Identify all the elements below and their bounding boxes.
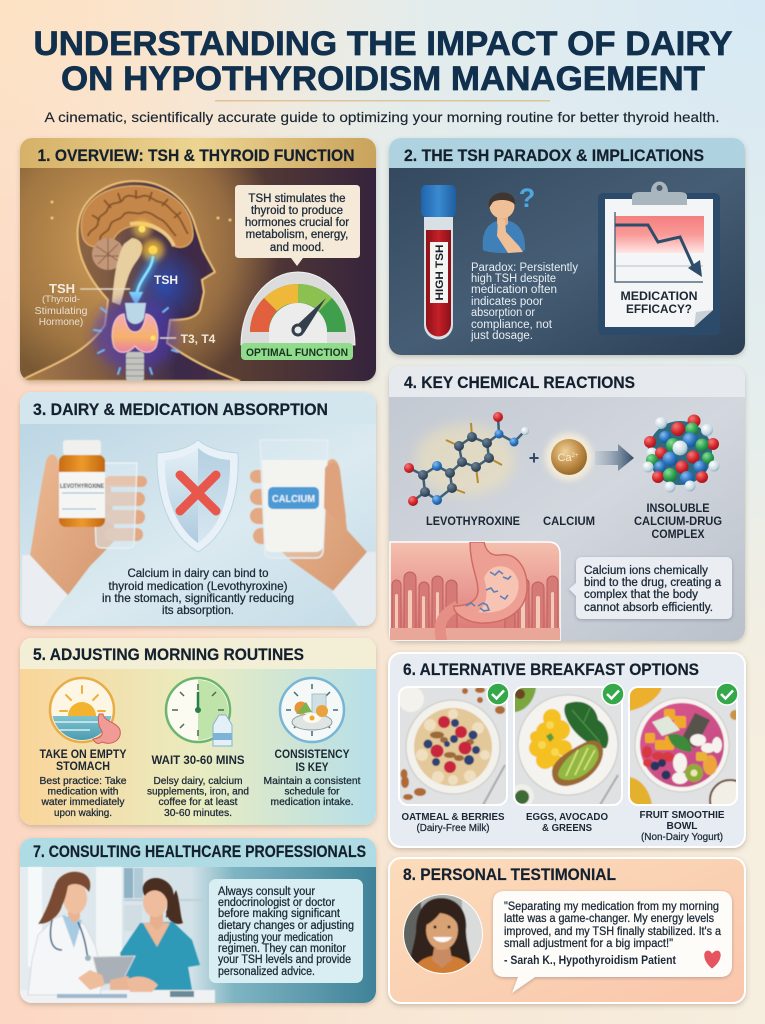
- food card: eggs avocado and greens: & GREENS: [542, 822, 592, 834]
- food card: eggs avocado and greens: EGGS, AVOCADO: [526, 811, 608, 823]
- callout: consult your doctor: your TSH levels and provide: [218, 954, 351, 966]
- heading: 2. THE TSH PARADOX & IMPLICATIONS: [404, 146, 704, 165]
- illustration: head, brain and thyroid: [20, 181, 240, 381]
- gauge: optimal function: [241, 272, 355, 360]
- text: calcium binding explanation: in the stomach, significantly reducing: [102, 591, 294, 605]
- callout: consult your doctor: regimen. They can monitor: [218, 943, 346, 955]
- icon: clock with breakfast: [280, 678, 344, 742]
- icon: blood test tube: HIGH TSH: [434, 244, 446, 300]
- callout: calcium binding: cannot absorb efficiently.: [584, 602, 713, 614]
- icon: shield with cross: [157, 440, 238, 552]
- illustration: right hand with milk glass: [250, 440, 376, 626]
- diagram: insoluble complex: COMPLEX: [652, 529, 705, 541]
- step: wait 30-60 minutes: Delsy dairy, calcium: [154, 775, 243, 787]
- diagram: insoluble complex: [634, 414, 722, 541]
- diagram: calcium ion: [543, 433, 595, 528]
- icon: green check: [716, 683, 738, 705]
- heading: 3. DAIRY & MEDICATION ABSORPTION: [33, 400, 328, 419]
- panel 4: key chemical reactions: [389, 366, 745, 642]
- label: TSH arrow: TSH: [154, 273, 178, 287]
- speech bubble: testimonial: [493, 891, 732, 993]
- food card: fruit smoothie bowl: FRUIT SMOOTHIE: [640, 809, 724, 821]
- step: take on empty stomach: upon waking.: [54, 807, 112, 819]
- text: paradox explanation: [470, 262, 578, 342]
- callout: TSH role: thyroid to produce: [251, 205, 343, 217]
- step: wait 30-60 minutes: coffee for at least: [158, 796, 238, 808]
- text: paradox explanation: absorption or: [471, 307, 535, 319]
- icon: green check: [487, 683, 509, 705]
- title: ON HYPOTHYROIDISM MANAGEMENT: [61, 60, 705, 98]
- food card: oatmeal and berries: [398, 683, 509, 834]
- text: paradox explanation: high TSH despite: [471, 273, 556, 285]
- illustration: left hand with medication and water: LEVOTHYROXINE: [60, 483, 105, 490]
- diagram: calcium ion: 2+: [572, 453, 579, 459]
- step: take on empty stomach: STOMACH: [56, 761, 110, 773]
- step: take on empty stomach: Best practice: Take: [40, 775, 127, 787]
- step: consistency is key: IS KEY: [296, 762, 329, 774]
- callout: consult your doctor: adjusting your medication: [218, 932, 333, 944]
- label: TSH definition: Hormone): [39, 317, 83, 328]
- food card: fruit smoothie bowl: (Non-Dairy Yogurt): [641, 831, 723, 843]
- callout: consult your doctor: dietary changes or adjusting: [218, 920, 354, 932]
- text: paradox explanation: medication often: [471, 284, 557, 296]
- icon: clipboard with falling chart: EFFICACY?: [626, 302, 692, 316]
- panel 1: overview: [18, 138, 378, 386]
- illustration: right hand with milk glass: CALCIUM: [272, 493, 315, 505]
- icon: sunrise and stomach: [50, 678, 120, 746]
- callout: TSH role: hormones crucial for: [245, 217, 349, 229]
- food card: oatmeal and berries: OATMEAL & BERRIES: [402, 811, 504, 823]
- diagram: calcium ion: Ca: [558, 452, 572, 464]
- step: take on empty stomach: water immediately: [41, 796, 125, 808]
- callout: consult your doctor: personalized advice.: [218, 966, 315, 978]
- photo: oatmeal bowl: [398, 686, 507, 805]
- photo: eggs plate: [510, 687, 622, 808]
- text: calcium binding explanation: Calcium in dairy can bind to: [128, 566, 269, 580]
- illustration: stomach and intestine: [390, 542, 560, 642]
- heading: 4. KEY CHEMICAL REACTIONS: [404, 373, 635, 392]
- step: wait 30-60 minutes: [147, 678, 249, 819]
- diagram: levothyroxine molecule: LEVOTHYROXINE: [426, 516, 520, 528]
- label: TSH definition: (Thyroid-: [42, 294, 80, 305]
- label: TSH definition: TSH: [49, 281, 75, 296]
- food card: eggs avocado and greens: [510, 683, 624, 834]
- heading: 5. ADJUSTING MORNING ROUTINES: [33, 645, 304, 664]
- step: take on empty stomach: medication with: [48, 786, 119, 798]
- speech bubble: testimonial: latte was a game-changer. My energy levels: [504, 911, 714, 925]
- icon: blood test tube: [421, 185, 456, 340]
- title: [34, 25, 733, 98]
- icon: clipboard with falling chart: [598, 182, 720, 335]
- step: take on empty stomach: TAKE ON EMPTY: [40, 749, 127, 761]
- icon: heart: [704, 951, 721, 968]
- speech bubble: testimonial: - Sarah K., Hypothyroidism Patient: [504, 955, 676, 967]
- text: paradox explanation: just dosage.: [470, 330, 533, 342]
- illustration: doctor and nurse: [20, 867, 215, 1003]
- heading: 7. CONSULTING HEALTHCARE PROFESSIONALS: [33, 842, 366, 861]
- callout: consult your doctor: before making significant: [218, 908, 341, 920]
- callout: TSH role: [235, 185, 360, 266]
- photo: smoothie bowl: [630, 688, 736, 804]
- speech bubble: testimonial: "Separating my medication from my morning: [504, 899, 719, 913]
- step: consistency is key: schedule for: [284, 786, 340, 798]
- step: consistency is key: medication intake.: [270, 796, 354, 808]
- speech bubble: testimonial: small adjustment for a big impact!": [504, 936, 673, 950]
- panel 5: adjusting morning routines: [20, 638, 376, 825]
- callout: calcium binding: Calcium ions chemically: [584, 565, 708, 577]
- diagram: calcium ion: CALCIUM: [543, 516, 595, 528]
- icon: thinking person: [483, 183, 535, 253]
- callout: calcium binding: complex that the body: [584, 589, 698, 601]
- speech bubble: testimonial: improved, and my TSH finally stabilized. It's a: [504, 924, 721, 938]
- panel 2: TSH paradox: [389, 138, 745, 355]
- icon: thinking person: ?: [519, 183, 535, 213]
- icon: clipboard with falling chart: MEDICATION: [620, 289, 698, 303]
- arrow: reaction direction: [595, 444, 634, 471]
- heading: 1. OVERVIEW: TSH & THYROID FUNCTION: [38, 146, 354, 165]
- callout: calcium binding: bind to the drug, creating a: [584, 577, 722, 589]
- subtitle: A cinematic, scientifically accurate guide to optimizing your morning routine for better thyroid health.: [44, 109, 720, 125]
- step: wait 30-60 minutes: supplements, iron, and: [147, 786, 249, 798]
- callout: consult your doctor: Always consult your: [218, 886, 315, 898]
- diagram: insoluble complex: INSOLUBLE: [646, 503, 710, 515]
- step: wait 30-60 minutes: 30-60 minutes.: [164, 807, 232, 819]
- text: paradox explanation: indicates poor: [471, 296, 543, 308]
- step: consistency is key: CONSISTENCY: [274, 749, 350, 761]
- icon: green check: [602, 683, 624, 705]
- panel 7: consulting healthcare professionals: [20, 838, 376, 1003]
- illustration: left hand with medication and water: [22, 440, 147, 625]
- label: TSH definition: [35, 284, 87, 327]
- text: paradox explanation: Paradox: Persistently: [471, 262, 578, 274]
- portrait: smiling patient: [403, 894, 484, 975]
- food card: fruit smoothie bowl: [629, 683, 750, 843]
- callout: TSH role: metabolism, energy,: [246, 229, 348, 241]
- icon: plus sign: +: [529, 448, 539, 468]
- text: calcium binding explanation: [102, 566, 294, 617]
- step: take on empty stomach: [40, 678, 127, 819]
- step: consistency is key: [264, 678, 361, 808]
- callout: consult your doctor: endocrinologist or doctor: [218, 897, 335, 909]
- panel 8: personal testimonial: [389, 858, 745, 1003]
- title: UNDERSTANDING THE IMPACT OF DAIRY: [34, 25, 733, 63]
- label: T3 T4: T3, T4: [181, 332, 216, 346]
- callout: TSH role: and mood.: [270, 242, 324, 254]
- gauge: optimal function: OPTIMAL FUNCTION: [246, 347, 348, 359]
- diagram: insoluble complex: CALCIUM-DRUG: [634, 516, 722, 528]
- step: consistency is key: Maintain a consistent: [264, 775, 361, 787]
- callout: consult your doctor: [209, 879, 363, 983]
- diagram: levothyroxine molecule: [404, 412, 529, 528]
- callout: TSH role: TSH stimulates the: [248, 193, 346, 205]
- heading: 8. PERSONAL TESTIMONIAL: [403, 865, 616, 884]
- heading: 6. ALTERNATIVE BREAKFAST OPTIONS: [403, 660, 699, 679]
- step: wait 30-60 minutes: WAIT 30-60 MINS: [152, 755, 245, 767]
- panel 6: alternative breakfast options: [389, 653, 750, 847]
- icon: clock and milk carton: [166, 678, 232, 746]
- food card: oatmeal and berries: (Dairy-Free Milk): [416, 822, 490, 834]
- text: paradox explanation: compliance, not: [471, 319, 553, 331]
- label: TSH definition: Stimulating: [34, 306, 88, 317]
- food card: fruit smoothie bowl: BOWL: [666, 820, 698, 832]
- panel 3: dairy and medication absorption: [20, 392, 376, 626]
- callout: calcium binding: [569, 557, 732, 619]
- text: calcium binding explanation: its absorption.: [162, 603, 234, 617]
- text: calcium binding explanation: thyroid medication (Levothyroxine): [108, 579, 288, 593]
